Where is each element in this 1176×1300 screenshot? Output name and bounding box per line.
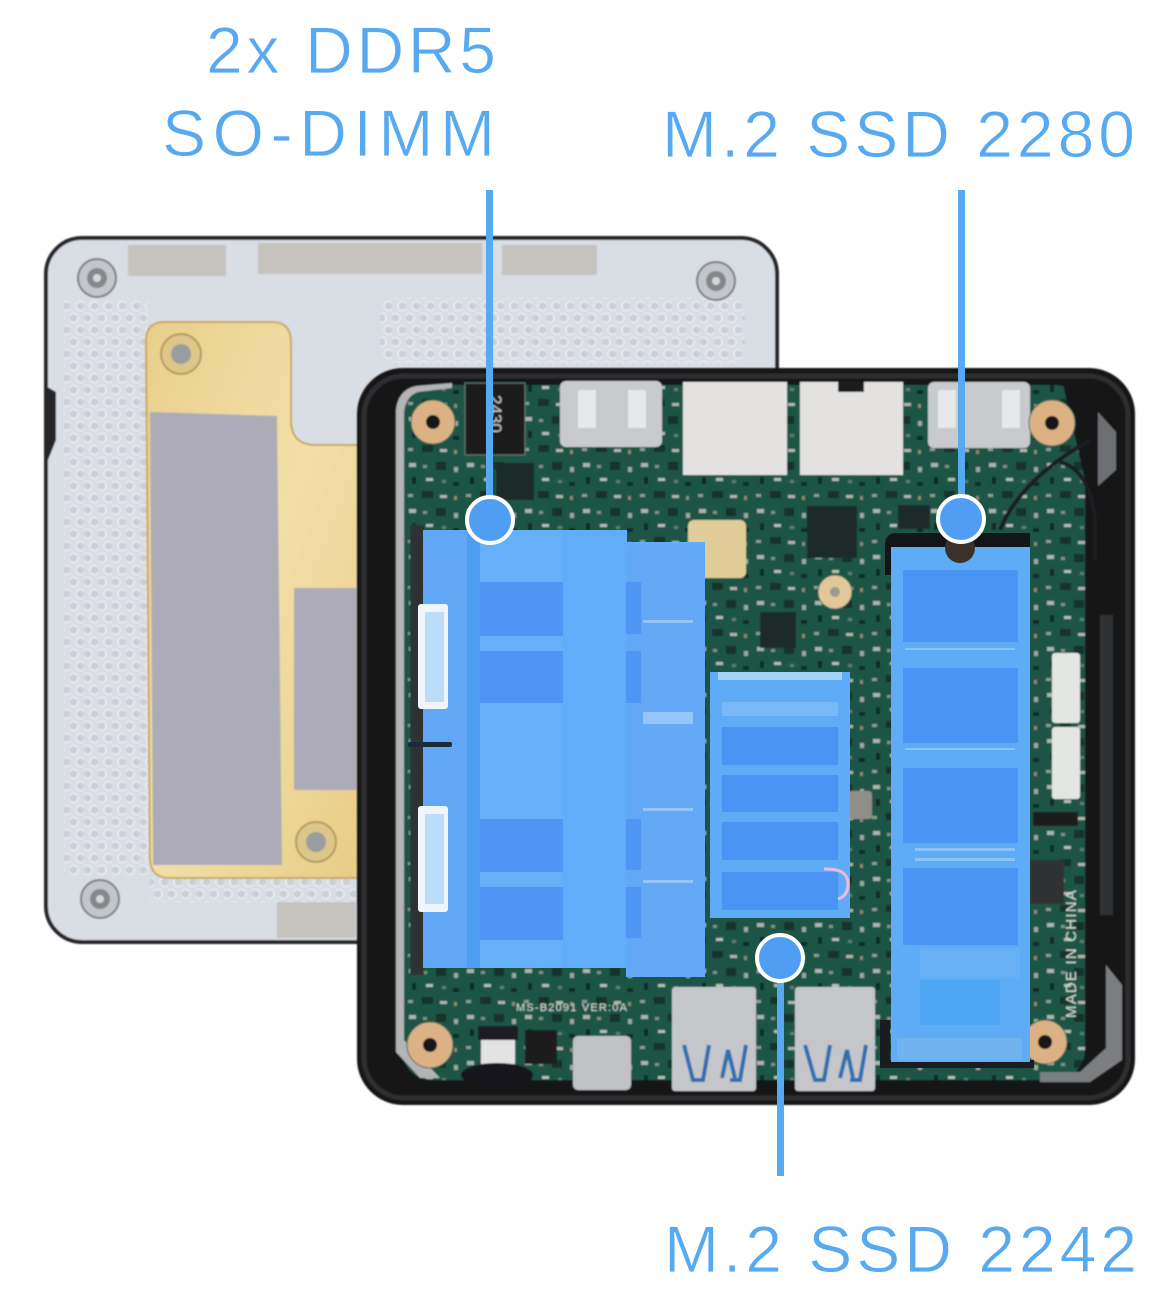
marking: made in china: MADE IN CHINA xyxy=(1063,889,1080,1018)
rear connectors: 2430 xyxy=(486,395,505,433)
side connectors xyxy=(1052,653,1080,799)
right side frame xyxy=(1062,380,1118,1085)
back unit: bottom cover plate xyxy=(44,238,777,942)
board marking: MS-B2091 VER:0A xyxy=(516,1002,628,1014)
gold finger edge xyxy=(897,1038,1022,1060)
callout: M.2 2242 leader line and marker xyxy=(757,935,803,1176)
DDR5 SO-DIMM highlighted module xyxy=(408,530,705,977)
label: M.2 SSD 2242: M.2 SSD 2242 xyxy=(664,1212,1137,1286)
label: M.2 SSD 2280: M.2 SSD 2280 xyxy=(662,97,1135,171)
BIOS sticker xyxy=(688,520,746,578)
left side latch xyxy=(44,385,56,470)
callout: DDR5 leader line and marker xyxy=(467,190,513,543)
label: 2x DDR5 SO-DIMM: SO-DIMM xyxy=(162,96,495,170)
flash chips xyxy=(903,570,1018,945)
motherboard xyxy=(402,385,1085,1080)
capacitor ring xyxy=(824,869,848,899)
M.2 SSD 2242 highlighted module xyxy=(710,672,850,918)
front connectors xyxy=(461,987,875,1091)
label: 2x DDR5 SO-DIMM xyxy=(162,13,496,170)
memory slot rail xyxy=(410,525,424,975)
gold heat spreader xyxy=(146,322,360,878)
front unit: open chassis with motherboard xyxy=(357,368,1135,1105)
module labels xyxy=(418,604,448,912)
M.2 SSD 2280 highlighted module xyxy=(880,533,1034,1068)
thermal pad large xyxy=(150,412,282,865)
mounting standoffs xyxy=(407,400,1075,1068)
callout: M.2 2280 leader line and marker xyxy=(938,190,984,542)
chips on board xyxy=(496,463,1078,904)
memory chips xyxy=(480,582,641,940)
tape strips xyxy=(128,243,597,938)
thermal pad small xyxy=(294,588,357,790)
screws on back plate xyxy=(78,259,735,918)
antenna cable xyxy=(1000,440,1095,560)
flash chips xyxy=(722,727,838,910)
rear connectors xyxy=(465,381,1030,475)
inductor xyxy=(848,791,872,819)
label: 2x DDR5 SO-DIMM: 2x DDR5 xyxy=(206,13,496,87)
